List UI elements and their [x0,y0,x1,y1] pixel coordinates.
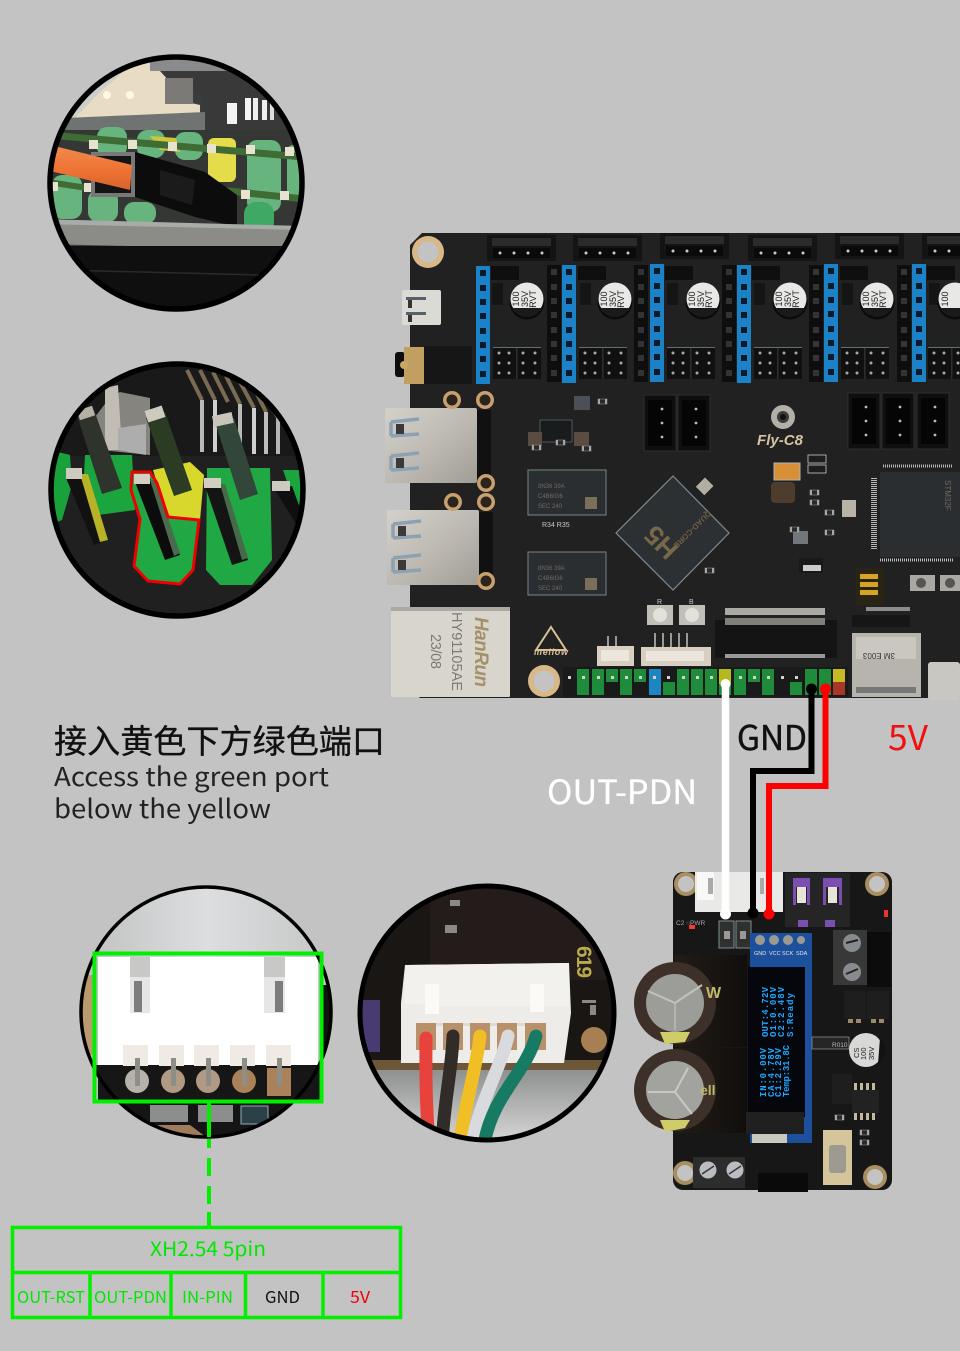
electrolytic capacitors: RVT [704,290,714,308]
circle outline [81,887,331,1137]
pin 5V: 5V [350,1284,371,1308]
photo: 5-wire harness plugged in: 619 [572,946,595,978]
Ethernet jack: HanRun [470,617,491,687]
OLED display: SDA [796,951,808,957]
OLED display: GND [754,951,766,957]
electrolytic capacitors: 35V [870,291,880,307]
USB-C port bottom [928,662,960,700]
OLED display: IN:0.00V [759,1047,769,1097]
solder joints [98,1058,320,1100]
electrolytic capacitors: RVT [528,290,538,308]
wire label: GND: GND [737,711,807,760]
English subtitle line 1: Access the green port [54,757,329,794]
driver sockets: blue columns [476,264,926,384]
Ethernet jack: 23/08 [427,634,443,669]
heading text [54,715,385,826]
electrolytic capacitors: 35V [696,291,706,307]
small fan connectors right [848,393,949,449]
driver sockets: black columns [491,265,955,382]
OLED display: SCK [782,951,794,957]
current-sense resistor and small capacitor: 35V [867,1047,876,1060]
memory chips: SEC 240 [538,586,563,592]
M.2 slot [715,608,837,658]
red wire: 5V [764,684,831,920]
memory chips: C4B6IG6 [538,576,563,582]
current-sense resistor and small capacitor: R010 [832,1042,848,1049]
wires between mainboard and module [720,679,831,920]
screw terminal top [833,930,891,987]
pin GND: GND [265,1284,300,1308]
side button [823,1130,852,1185]
OLED display: C1:2.29V [774,1047,784,1097]
OLED display: O1:0.00V [769,986,779,1037]
SoC H5: QUAD-CORE [671,509,713,550]
dashed leader line [207,1103,211,1227]
memory chips: SEC 240 [538,504,563,510]
English subtitle line 2: below the yellow [54,789,271,826]
module board: power monitor with OLED [634,872,892,1192]
large capacitor bodies [675,955,747,1133]
red outline: green port [131,472,199,584]
bottom terminal [693,1157,808,1192]
electrolytic capacitors: 100 [940,291,950,307]
USB-A port purple [785,873,850,927]
current-sense resistor and small capacitor: CS [852,1048,861,1058]
green highlight box [94,954,322,1102]
memory chips: C4B6IG6 [538,494,563,500]
MCU chip: STM32F [943,480,952,511]
mainboard: Fly-C8 [385,233,960,700]
Ethernet jack [391,607,510,697]
wire label: 5V: 5V [888,711,928,760]
white JST connectors [597,633,711,666]
large capacitor upper [634,962,722,1044]
USB-C port top [402,290,441,325]
pinout table [12,1228,401,1318]
memory chips: 8N36 39A [538,566,565,572]
board name: Fly-C8 [757,432,804,449]
electrolytic capacitors: 100 [599,291,609,307]
circle outline [360,886,614,1140]
tact buttons right [910,575,960,591]
pin header blocks [493,347,960,379]
electrolytic capacitors: 100 [511,291,521,307]
stepper connectors [487,233,960,261]
LED and PWR label: C2 ○PWR [676,920,706,927]
scattered passives: centre right [696,455,856,573]
electrolytic capacitors: 35V [783,291,793,307]
reset / boot buttons: B [689,599,694,606]
MCU chip [874,466,960,560]
reset / boot buttons [647,599,705,625]
LED and PWR label [676,910,888,929]
white connector body [98,957,318,1067]
Ethernet jack: HY91105AE [448,612,464,691]
photo: jumper wire plugged into board header [40,55,310,316]
electrolytic capacitors: 35V [608,291,618,307]
OLED display: OUT:4.72V [761,986,771,1037]
small fan connectors centre [644,395,710,451]
SD card slot [852,633,921,697]
white input connector [695,872,783,912]
FFC connector right [852,607,910,627]
regulator and IC [832,1074,879,1145]
electrolytic capacitors: 100 [774,291,784,307]
USB ports stack [385,391,495,590]
pin IN-PIN: IN-PIN [182,1284,233,1308]
electrolytic capacitors: 100 [861,291,871,307]
pin OUT-RST: OUT-RST [17,1284,85,1308]
electrolytic capacitors: RVT [791,290,801,308]
large capacitor upper: W [706,985,722,1002]
mellow logo [534,627,569,657]
electrolytic capacitors: 35V [520,291,530,307]
white wire: OUT-PDN [720,679,731,920]
current-sense resistor and small capacitor [812,1033,885,1067]
large capacitor lower [634,1049,716,1132]
current-sense resistor and small capacitor: 100 [859,1047,868,1060]
scattered passives: upper centre cluster [528,396,607,451]
OLED display: VCC [769,951,781,957]
shunt resistors [719,921,751,948]
electrolytic capacitors: RVT [878,290,888,308]
white plug [401,963,571,1063]
OLED display: Temp:31.8C [782,1044,792,1097]
SoC H5 [616,476,729,590]
corner holes [673,872,889,1189]
pin OUT-PDN: OUT-PDN [94,1284,167,1308]
DIP switch [856,568,884,605]
black wire: GND [748,684,817,918]
memory chips [528,470,606,595]
SD card slot: 3M E003 [862,651,895,660]
photo: header pins with target green port outlined in red [50,362,306,621]
electrolytic capacitors: RVT [616,290,626,308]
wire label: OUT-PDN: OUT-PDN [547,765,697,814]
memory chips: 8N36 39A [538,484,565,490]
GPIO header row [563,667,848,697]
mounting holes [412,236,560,697]
OLED display: CA:4.78V [767,1047,777,1097]
table heading: XH2.54 5pin [150,1233,266,1262]
OLED display: S:Ready [786,992,796,1037]
photo: 5-wire harness plugged in [358,885,616,1145]
coloured wires [426,1036,536,1145]
Chinese title: 接入黄色下方绿色端口 [54,715,385,763]
OLED display [746,933,812,1143]
mainboard: Fly-C8: R34 R35 [542,522,570,529]
mellow logo: mellow [534,647,569,657]
large capacitor lower: ell [700,1082,716,1098]
MOSFETs [844,991,889,1023]
electrolytic capacitors: 100 [687,291,697,307]
photo: XH2.54 socket on board [80,887,334,1140]
electrolytic capacitors [510,282,960,320]
audio jack [395,346,472,384]
table grid [12,1228,401,1318]
OLED display: C2:2.48V [777,986,787,1037]
standoff post [771,405,795,429]
SoC H5: H5 [639,519,684,565]
reset / boot buttons: R [657,599,662,606]
